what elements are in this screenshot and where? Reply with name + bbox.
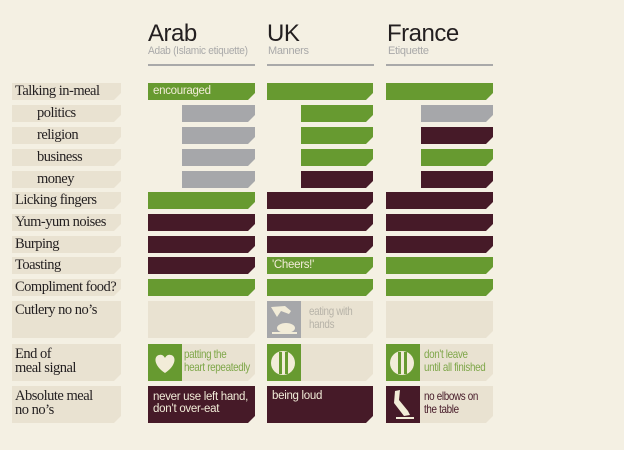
icon: plate and cutlery bbox=[267, 344, 301, 381]
text: don't leave bbox=[424, 347, 468, 361]
text: France bbox=[387, 20, 459, 47]
header: UK bbox=[267, 20, 374, 66]
text: Adab (Islamic etiquette) bbox=[148, 45, 248, 57]
text: no elbows on bbox=[424, 389, 478, 403]
text: Licking fingers bbox=[15, 192, 96, 208]
text: politics bbox=[37, 105, 76, 121]
text: hands bbox=[309, 317, 334, 331]
text: eating with bbox=[309, 304, 352, 318]
text: Absolute meal bbox=[15, 388, 93, 404]
text: being loud bbox=[272, 390, 322, 402]
text: patting the bbox=[184, 347, 226, 361]
text: Manners bbox=[268, 45, 309, 57]
text: Compliment food? bbox=[15, 279, 116, 295]
text: no no’s bbox=[15, 402, 54, 418]
icon: plate and cutlery bbox=[386, 344, 420, 381]
text: Talking in-meal bbox=[15, 83, 100, 99]
text: meal signal bbox=[15, 360, 76, 376]
header: Arab bbox=[148, 20, 255, 66]
text: don’t over-eat bbox=[153, 403, 219, 415]
icon: hand and plate bbox=[267, 301, 301, 338]
row labels bbox=[12, 83, 121, 423]
text: heart repeatedly bbox=[184, 360, 250, 374]
icon: heart bbox=[148, 344, 182, 381]
column: France bbox=[386, 83, 493, 423]
text: Etiquette bbox=[388, 45, 429, 57]
text: Burping bbox=[15, 236, 59, 252]
text: money bbox=[37, 171, 74, 187]
text: End of bbox=[15, 346, 51, 362]
icon: elbow on table bbox=[386, 386, 420, 423]
column: UK bbox=[267, 83, 373, 423]
text: Yum-yum noises bbox=[15, 214, 106, 230]
column: Arab bbox=[148, 83, 255, 423]
text: Arab bbox=[148, 20, 197, 47]
text: religion bbox=[37, 127, 78, 143]
text: never use left hand, bbox=[153, 391, 248, 403]
text: until all finished bbox=[424, 360, 485, 374]
text: encouraged bbox=[153, 85, 211, 97]
text: business bbox=[37, 149, 82, 165]
text: the table bbox=[424, 402, 459, 416]
text: Cutlery no no’s bbox=[15, 302, 97, 318]
header: France bbox=[386, 20, 493, 66]
text: 'Cheers!' bbox=[272, 259, 314, 271]
text: UK bbox=[267, 20, 299, 47]
text: Toasting bbox=[15, 257, 61, 273]
